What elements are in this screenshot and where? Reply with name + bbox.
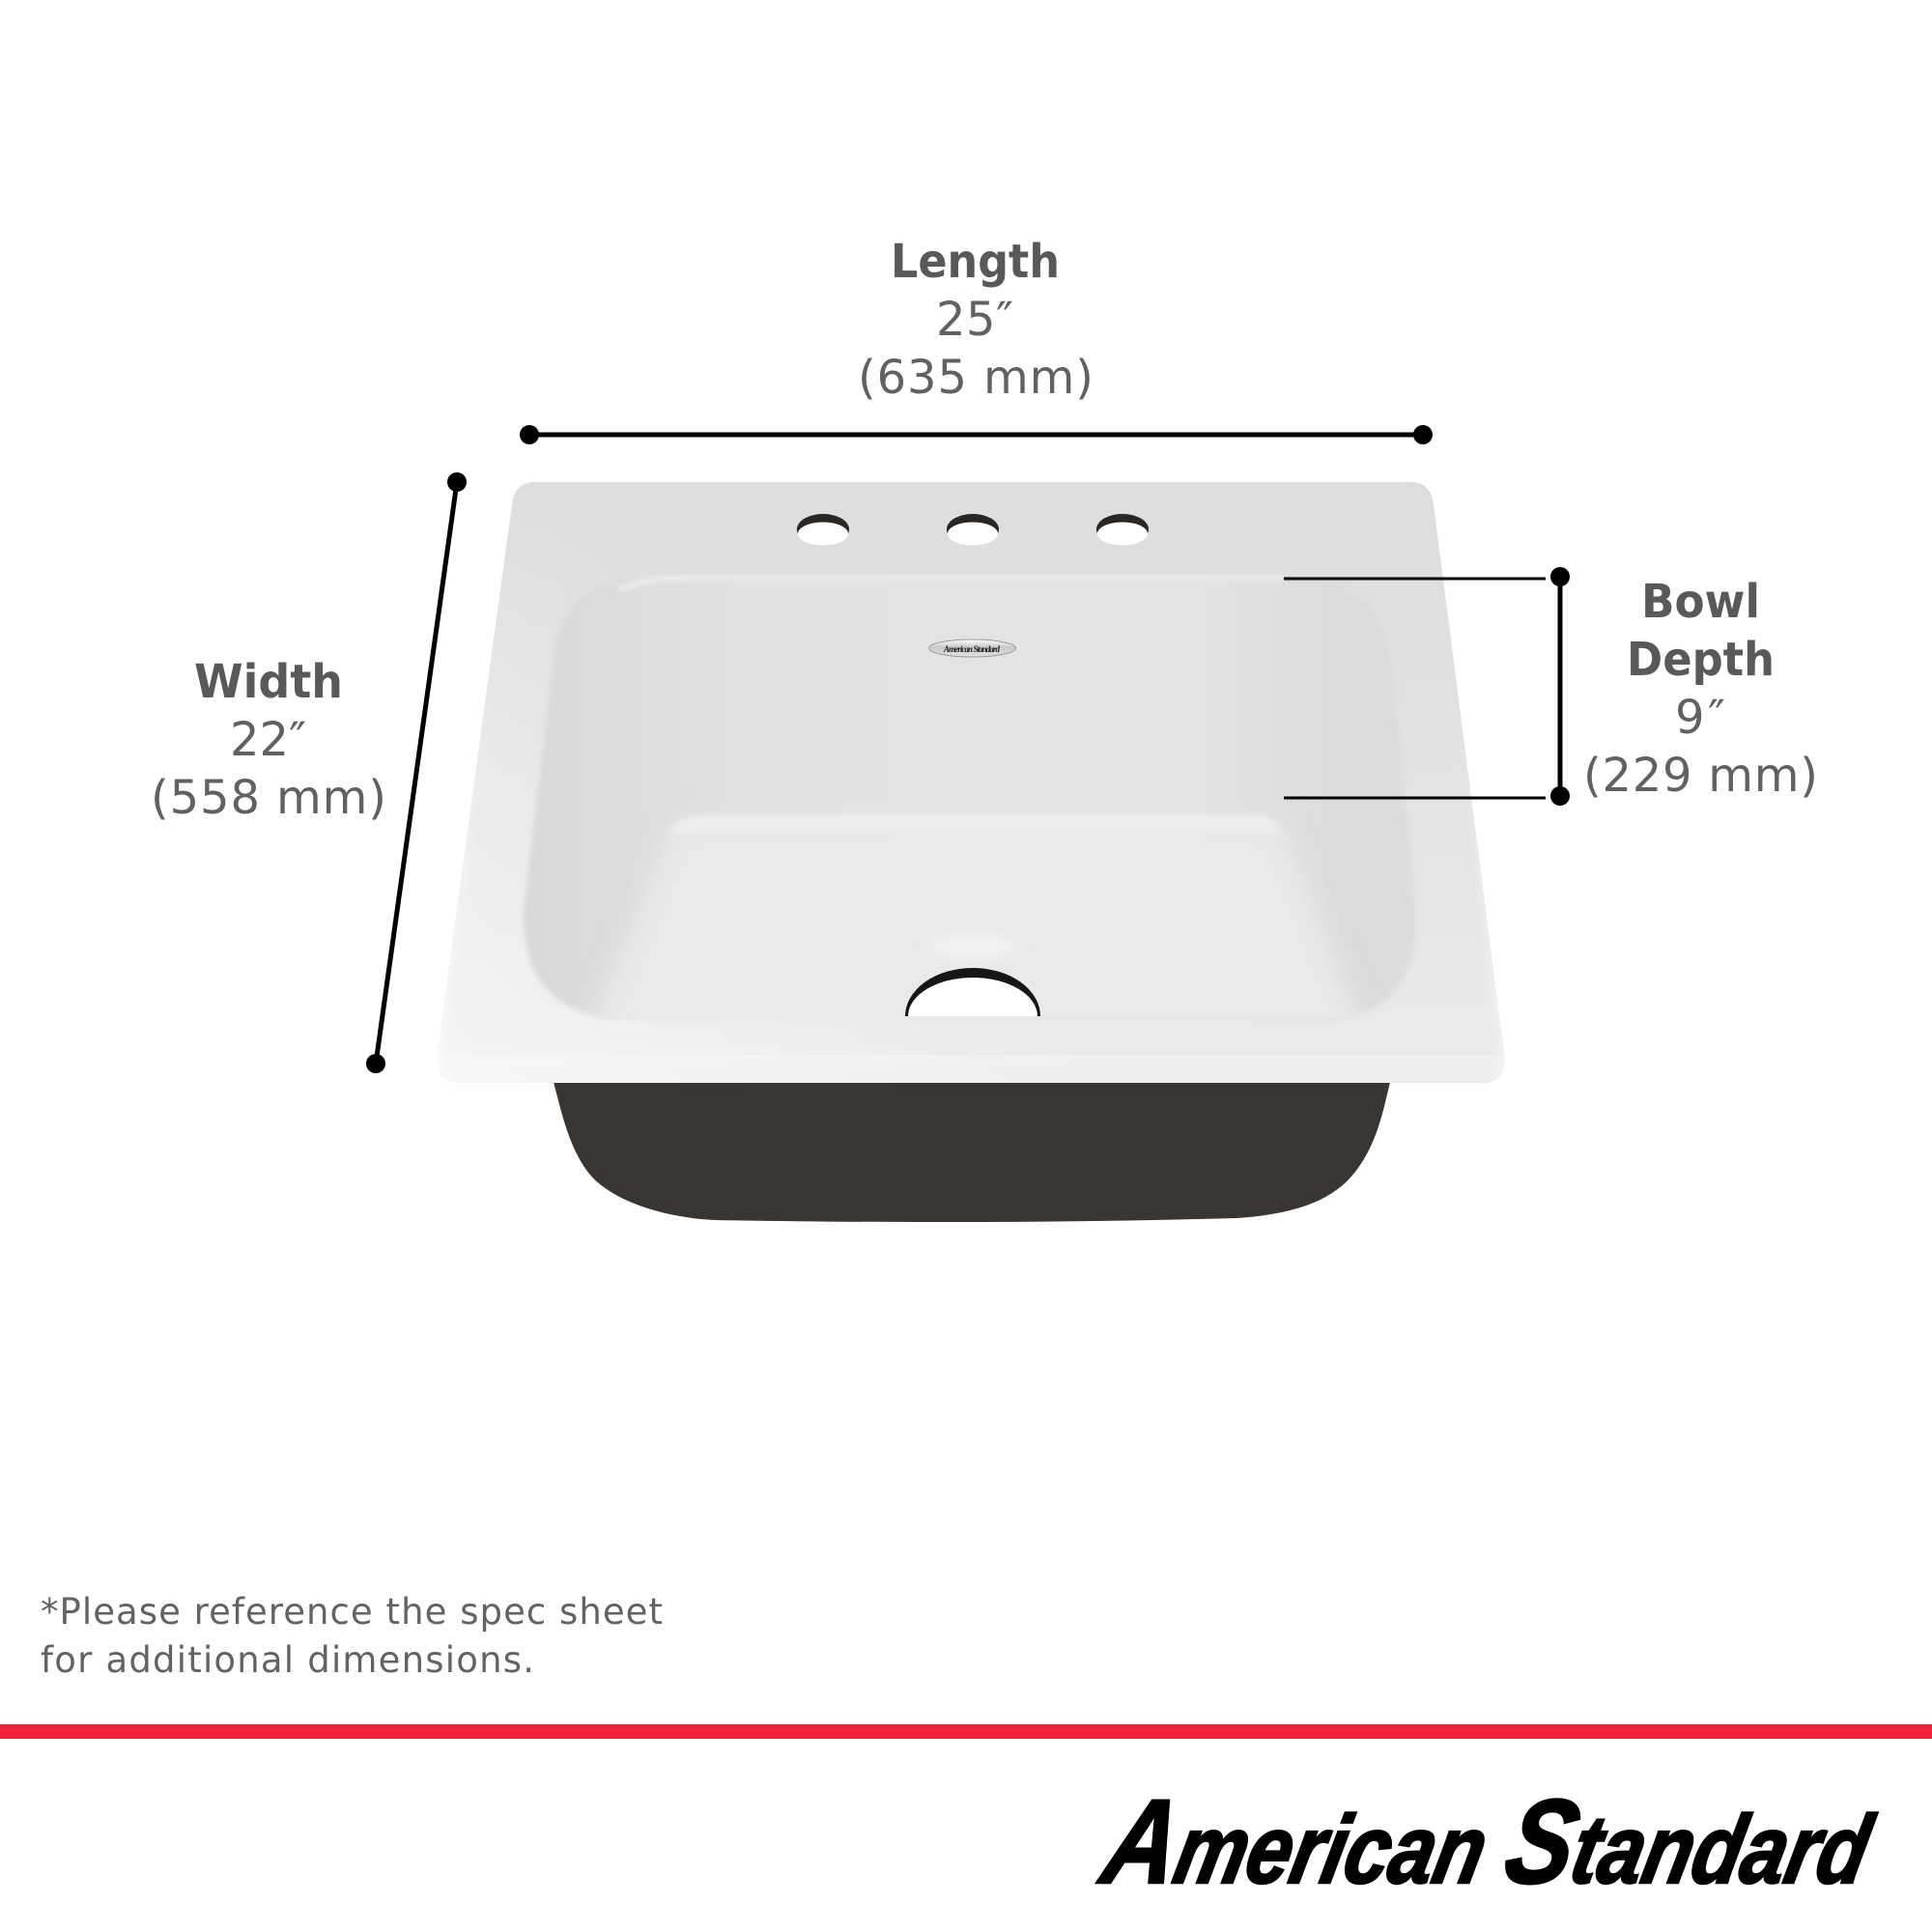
footnote text: *Please reference the spec sheet [41,1591,663,1633]
sink rim deck [437,482,1505,1083]
width dimension label: (558 mm) [151,771,386,825]
drain highlight [951,943,995,951]
bowl floor [600,837,1350,1017]
length dimension label: (635 mm) [858,351,1094,405]
footnote text: for additional dimensions. [41,1639,534,1681]
bowl depth dimension label: Depth [1627,633,1775,687]
hole 3 [1096,514,1149,545]
overflow badge [929,639,1016,657]
floor rear highlight [674,817,1275,831]
length dimension label [858,235,1094,405]
footnote text [41,1591,663,1681]
front lip [1499,1055,1505,1072]
rim side edge light [786,1079,1495,1083]
bowl depth dimension label: 9″ [1675,691,1725,745]
width dimension label [151,655,386,825]
arrow: length dimension line [520,425,1433,444]
arrow: width dimension line [366,472,467,1073]
overflow badge: American Standard [943,644,1001,654]
bowl depth dimension label: (229 mm) [1583,749,1818,803]
brand logo: American Standard [1091,1774,1887,1909]
length dimension label: 25″ [936,293,1013,347]
bowl back lip highlight [618,578,1285,590]
red divider bar [0,1724,1932,1739]
faucet holes [797,514,1149,545]
width dimension label: Width [194,655,343,709]
length dimension label: Length [891,235,1060,289]
bowl depth dimension label: Bowl [1641,575,1760,629]
dark underside basin [554,1082,1390,1222]
rim light overlay [437,482,1505,1083]
drain hole [905,968,1040,1016]
hole 2 [947,514,999,545]
bowl depth dimension label [1583,575,1818,803]
hole 1 [797,514,849,545]
arrow: bowl depth bracket [1284,567,1570,806]
bowl interior [600,815,1350,1017]
width dimension label: 22″ [230,713,306,767]
bowl soft base [524,580,1416,1018]
sink product image [425,482,1517,1222]
